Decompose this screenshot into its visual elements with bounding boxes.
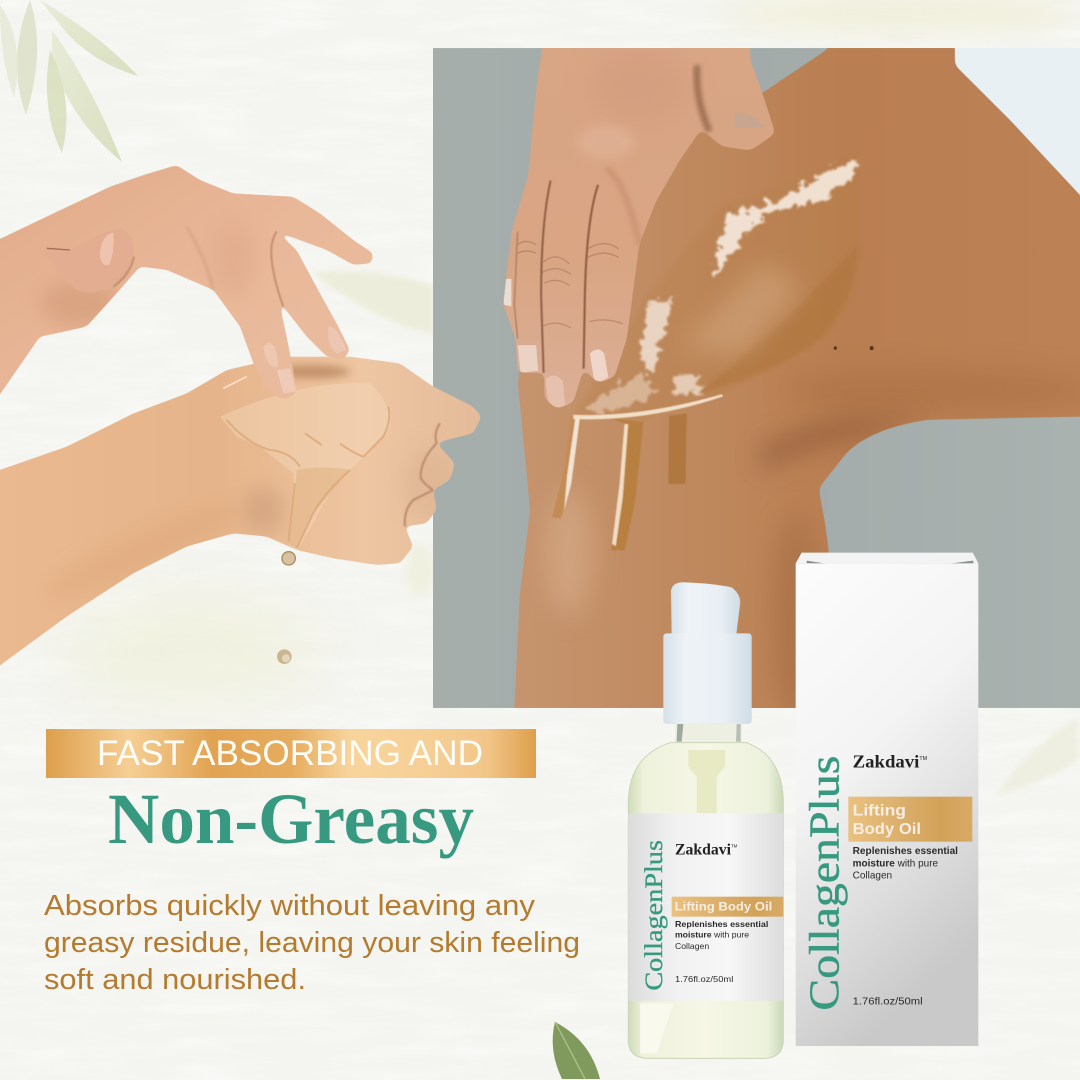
decorative leaves, top left — [0, 0, 138, 162]
box band title: Lifting — [853, 803, 906, 820]
bottle description: moisture with pure — [675, 930, 749, 940]
bottle description — [675, 919, 768, 951]
heading banner — [46, 729, 536, 778]
box brand: Zakdavi — [853, 752, 919, 772]
bottle label — [628, 813, 783, 1001]
description text — [44, 890, 580, 996]
leg — [495, 48, 1080, 719]
bottle brand: Zakdavi — [675, 842, 732, 859]
pump nozzle — [671, 582, 740, 637]
box brand vertical: CollagenPlus — [801, 756, 848, 1011]
bottle gold band — [672, 897, 783, 917]
bottle neck — [675, 723, 742, 744]
oil patch — [578, 324, 637, 414]
lower arm and hand — [0, 350, 483, 670]
knee photo with oil — [433, 48, 1080, 719]
pump collar — [663, 633, 752, 724]
description text: Absorbs quickly without leaving any — [44, 890, 536, 922]
hands applying oil — [0, 160, 483, 670]
box band title — [853, 803, 921, 838]
knuckle creases — [518, 241, 623, 328]
finger separators — [271, 232, 283, 307]
box — [796, 553, 978, 1046]
bottle band title: Lifting Body Oil — [675, 899, 772, 913]
bottle brand vertical: CollagenPlus — [640, 840, 668, 991]
box: TM — [919, 756, 927, 762]
fingernails — [328, 327, 347, 353]
bottle: TM — [731, 844, 738, 849]
nails — [590, 349, 608, 381]
box volume: 1.76fl.oz/50ml — [853, 997, 923, 1008]
description text: soft and nourished. — [44, 964, 306, 996]
oil drips — [552, 394, 723, 550]
box description — [853, 846, 958, 882]
finger folds — [405, 423, 440, 527]
oil droplets — [277, 552, 295, 664]
box gold band — [848, 797, 972, 842]
hand on knee — [504, 48, 774, 408]
bottle volume: 1.76fl.oz/50ml — [675, 974, 733, 984]
box description: Collagen — [853, 871, 892, 882]
oil highlights — [714, 161, 858, 279]
moles — [834, 346, 837, 350]
bottom leaf — [553, 1022, 600, 1079]
box band title: Body Oil — [853, 821, 921, 838]
heading: Non-Greasy: Non-Greasy — [108, 779, 474, 859]
bottle — [628, 582, 783, 1058]
upper hand — [0, 166, 373, 398]
product: box and bottle — [628, 553, 978, 1058]
paper background — [58, 0, 1079, 794]
bottle description: Collagen — [675, 941, 709, 951]
box description: Replenishes essential — [853, 846, 958, 857]
banner text: FAST ABSORBING AND — [97, 734, 483, 773]
description text: greasy residue, leaving your skin feeling — [44, 927, 580, 959]
thumb — [72, 284, 100, 292]
finger gaps — [584, 185, 598, 369]
box description: moisture with pure — [853, 858, 939, 869]
photo background — [433, 48, 1080, 708]
white towel — [953, 48, 1080, 196]
oil film — [220, 383, 390, 550]
bottle description: Replenishes essential — [675, 919, 768, 929]
glass body — [628, 743, 783, 1058]
